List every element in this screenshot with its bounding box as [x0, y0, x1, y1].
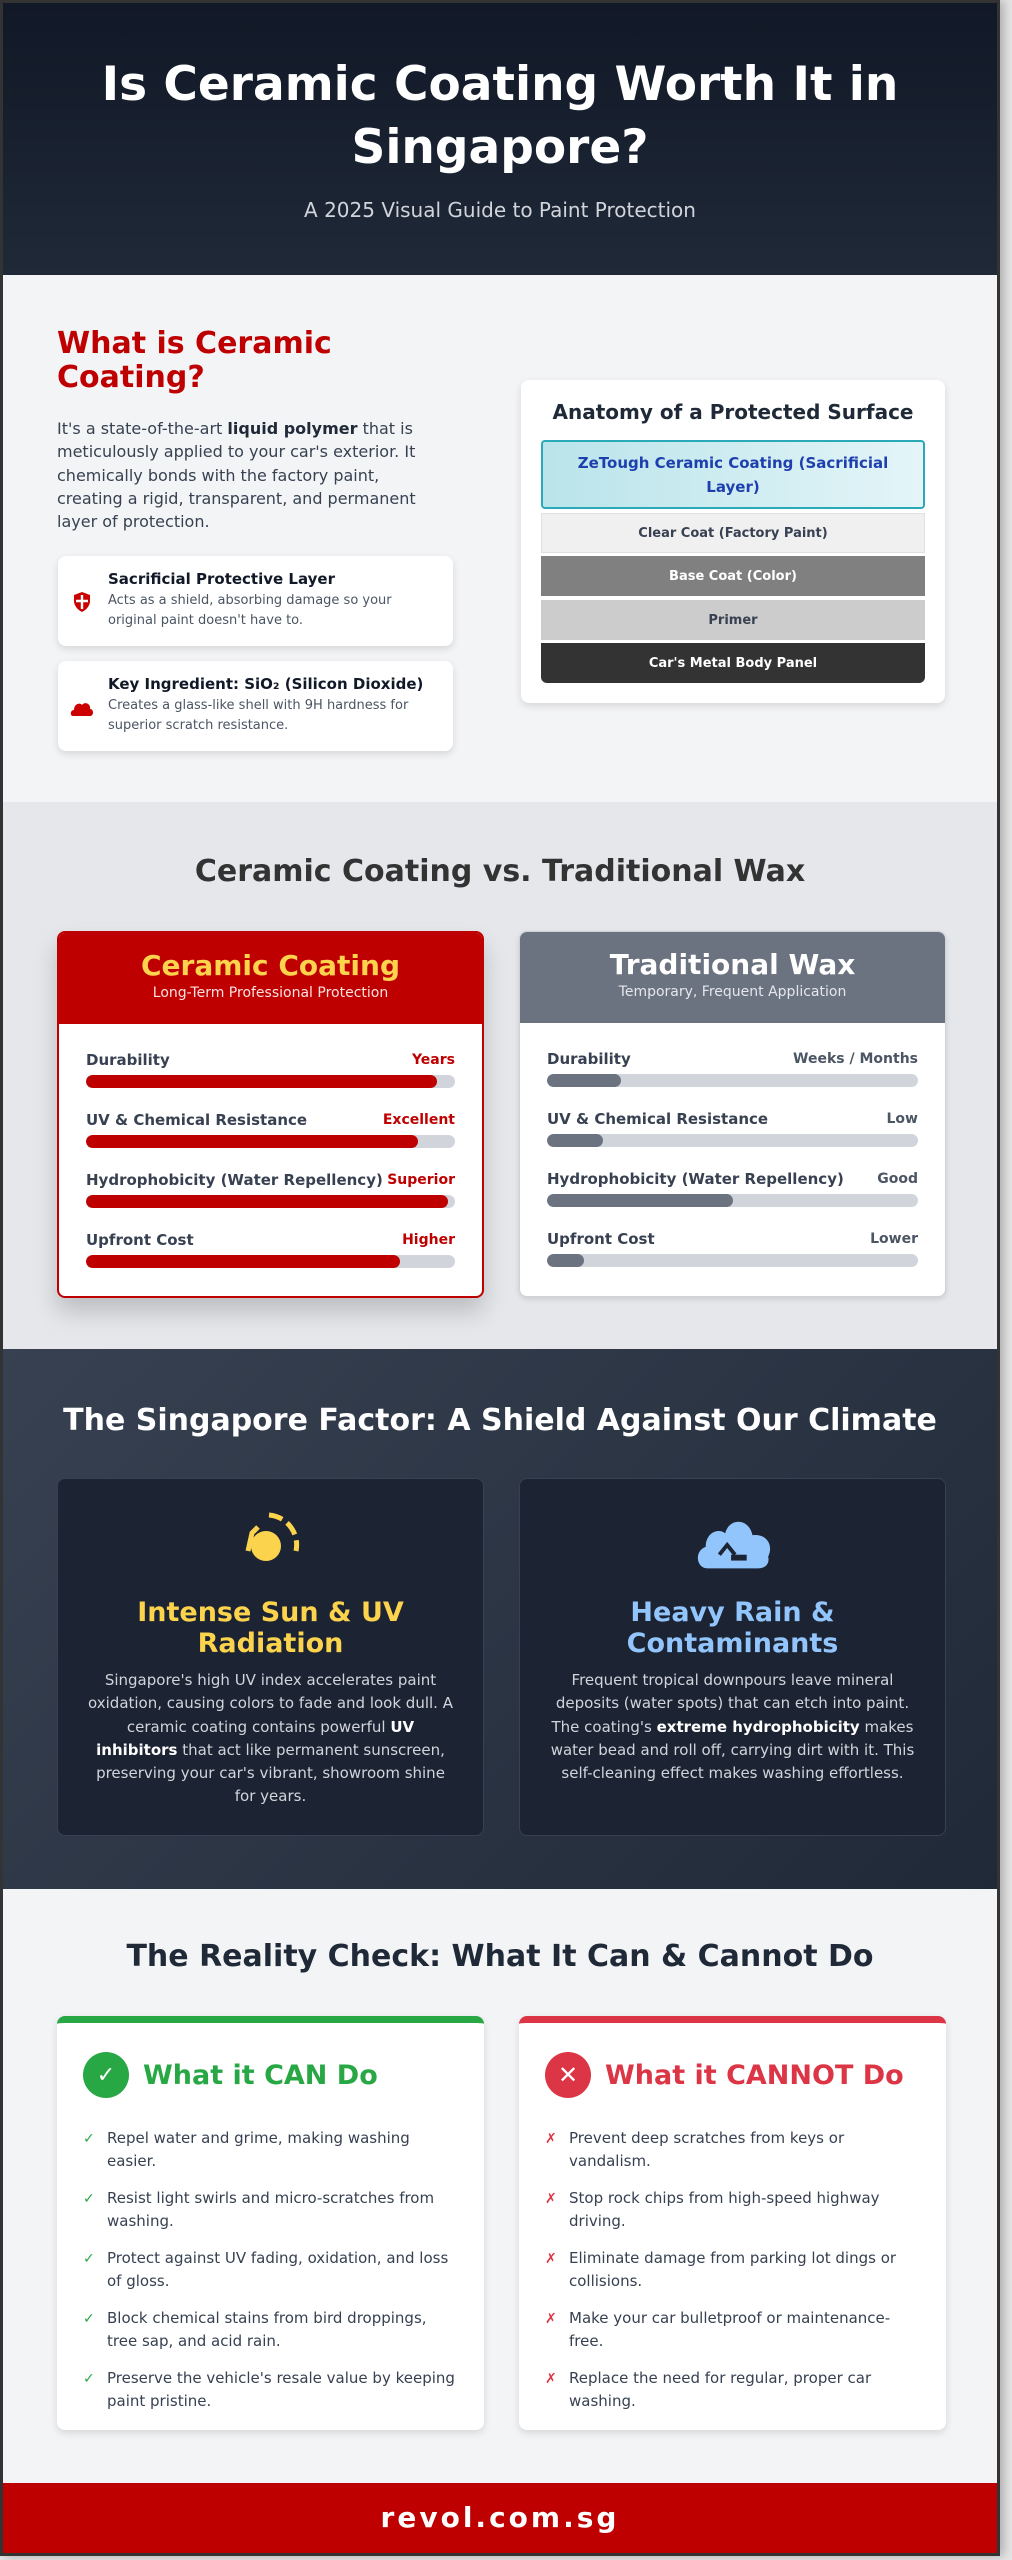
can header: What it CAN Do	[143, 2060, 378, 2090]
can list: Block chemical stains from bird droppings, tree sap, and acid rain.	[107, 2309, 427, 2350]
layer: clear coat: Clear Coat (Factory Paint)	[638, 526, 828, 540]
row uv: UV & Chemical Resistance	[86, 1111, 307, 1129]
row cost	[86, 1231, 455, 1268]
title: Is Ceramic Coating Worth It in	[102, 57, 898, 112]
row uv	[86, 1111, 455, 1148]
section: comparison	[3, 802, 997, 1349]
comparison title: Ceramic Coating vs. Traditional Wax	[195, 854, 805, 889]
can list: ✓	[83, 2251, 95, 2267]
paragraph	[57, 419, 416, 531]
paragraph: It's a state-of-the-art liquid polymer that is	[57, 419, 413, 438]
row uv: Low	[887, 1111, 918, 1127]
diagram title: Anatomy of a Protected Surface	[552, 400, 914, 424]
cannot list: ✗	[545, 2311, 557, 2327]
cannot header: ✕	[558, 2061, 578, 2089]
rain body: Frequent tropical downpours leave mineral deposits (water spots) that can etch into paint. The coating's extreme hydrophobicity makes water bead and roll off, carrying dirt with it. This self-cleaning effect makes washing effortless.	[551, 1671, 914, 1782]
card: rain	[519, 1478, 946, 1836]
row durability	[547, 1050, 918, 1087]
sun heading: Radiation	[198, 1628, 343, 1659]
card: sun	[57, 1478, 484, 1836]
row hydro: Good	[877, 1171, 918, 1187]
row durability: Durability	[547, 1050, 631, 1068]
subtitle: A 2025 Visual Guide to Paint Protection	[304, 198, 696, 222]
card: cannot do	[519, 2016, 946, 2430]
paragraph: chemically bonds with the factory paint,	[57, 466, 379, 485]
card header	[59, 933, 482, 1024]
row hydro: Hydrophobicity (Water Repellency)	[547, 1170, 844, 1188]
icon: cloud	[698, 1522, 770, 1568]
section: what is ceramic coating	[3, 275, 997, 802]
layer: metal: Car's Metal Body Panel	[649, 656, 817, 670]
can list: ✓	[83, 2131, 95, 2147]
card: can do	[57, 2016, 484, 2430]
card header: Long-Term Professional Protection	[153, 985, 388, 1001]
row hydro: Hydrophobicity (Water Repellency)	[86, 1171, 383, 1189]
icon: sun	[246, 1512, 300, 1561]
can list: ✓	[83, 2371, 95, 2387]
text: Acts as a shield, absorbing damage so your original paint doesn't have to.	[108, 593, 392, 628]
sg title: The Singapore Factor: A Shield Against Our Climate	[63, 1403, 937, 1438]
row uv	[547, 1110, 918, 1147]
diagram: anatomy	[521, 380, 945, 703]
cannot list: ✗	[545, 2371, 557, 2387]
layer: primer	[541, 600, 925, 640]
heading: what is ceramic coating: What is Ceramic	[57, 326, 332, 361]
title: Singapore?	[351, 120, 649, 175]
card: wax	[519, 931, 946, 1297]
can header: ✓	[97, 2062, 115, 2088]
row uv: Excellent	[383, 1112, 455, 1128]
can header	[83, 2052, 378, 2098]
cannot list: Stop rock chips from high-speed highway driving.	[569, 2189, 880, 2230]
row durability	[86, 1051, 455, 1088]
layer: clear coat	[541, 513, 925, 553]
text	[108, 675, 423, 733]
can list: Repel water and grime, making washing easier.	[107, 2129, 410, 2170]
cannot list: Eliminate damage from parking lot dings or collisions.	[569, 2249, 896, 2290]
footer	[3, 2483, 997, 2553]
sun body: Singapore's high UV index accelerates paint oxidation, causing colors to fade and look dull. A ceramic coating contains powerful UV inhibitors that act like permanent sunscreen, preserving your car's vibrant, showroom shine for years.	[88, 1671, 453, 1805]
row uv: UV & Chemical Resistance	[547, 1110, 768, 1128]
sun heading	[137, 1597, 404, 1659]
reality title: The Reality Check: What It Can & Cannot Do	[126, 1939, 874, 1974]
can list: Preserve the vehicle's resale value by keeping paint pristine.	[107, 2369, 455, 2410]
layer: metal	[541, 643, 925, 683]
row cost: Higher	[402, 1232, 455, 1248]
row durability: Durability	[86, 1051, 170, 1069]
layer: primer: Primer	[708, 612, 758, 628]
can list: Resist light swirls and micro-scratches from washing.	[107, 2189, 434, 2230]
cannot list: Prevent deep scratches from keys or vandalism.	[569, 2129, 844, 2170]
paragraph: creating a rigid, transparent, and permanent	[57, 489, 416, 508]
section: singapore factor	[3, 1349, 997, 1889]
paragraph: meticulously applied to your car's exterior. It	[57, 442, 415, 461]
feature card: sacrificial layer	[58, 556, 453, 646]
card header: Traditional Wax	[610, 948, 855, 981]
rain heading: Contaminants	[627, 1628, 838, 1659]
layer: base coat	[541, 556, 925, 596]
cannot list: Replace the need for regular, proper car washing.	[569, 2369, 871, 2410]
can list: ✓	[83, 2191, 95, 2207]
row hydro	[86, 1171, 455, 1208]
rain heading: Heavy Rain &	[630, 1597, 835, 1628]
can list: ✓	[83, 2311, 95, 2327]
icon: shield	[74, 592, 90, 612]
layer: base coat: Base Coat (Color)	[669, 568, 797, 584]
cannot header: What it CANNOT Do	[605, 2060, 904, 2090]
cannot list: ✗	[545, 2191, 557, 2207]
cannot list	[545, 2129, 896, 2410]
heading: what is ceramic coating	[57, 326, 332, 395]
footer: revol.com.sg	[381, 2501, 619, 2534]
row cost: Upfront Cost	[86, 1231, 194, 1249]
card header	[520, 932, 945, 1023]
cannot list: ✗	[545, 2251, 557, 2267]
row hydro: Superior	[387, 1172, 455, 1188]
section: reality check	[3, 1889, 997, 2483]
cannot list: Make your car bulletproof or maintenance-free.	[569, 2309, 890, 2350]
text: Creates a glass-like shell with 9H hardness for superior scratch resistance.	[108, 698, 408, 733]
rain heading	[627, 1597, 838, 1659]
row cost	[547, 1230, 918, 1267]
sun heading: Intense Sun & UV	[137, 1597, 404, 1628]
row durability: Years	[412, 1052, 455, 1068]
cannot header	[545, 2052, 904, 2098]
card header: Temporary, Frequent Application	[619, 984, 846, 1000]
can list: Protect against UV fading, oxidation, and loss of gloss.	[107, 2249, 448, 2290]
row cost: Upfront Cost	[547, 1230, 655, 1248]
layer: coating: ZeTough Ceramic Coating (Sacrificial Layer)	[578, 454, 888, 496]
heading: what is ceramic coating: Coating?	[57, 360, 205, 395]
text: Key Ingredient: SiO₂ (Silicon Dioxide)	[108, 675, 423, 693]
row durability: Weeks / Months	[793, 1051, 918, 1067]
card header: Ceramic Coating	[141, 949, 400, 982]
header	[3, 3, 997, 275]
icon: drop	[70, 703, 93, 716]
text: Sacrificial Protective Layer	[108, 570, 335, 588]
row cost: Lower	[870, 1231, 918, 1247]
feature card: SiO2	[58, 661, 453, 751]
layer: coating	[541, 440, 925, 509]
row hydro	[547, 1170, 918, 1207]
title	[102, 57, 898, 175]
cannot list: ✗	[545, 2131, 557, 2147]
paragraph: layer of protection.	[57, 512, 210, 531]
text	[108, 570, 392, 628]
can list	[83, 2129, 455, 2410]
card: ceramic	[57, 931, 484, 1298]
